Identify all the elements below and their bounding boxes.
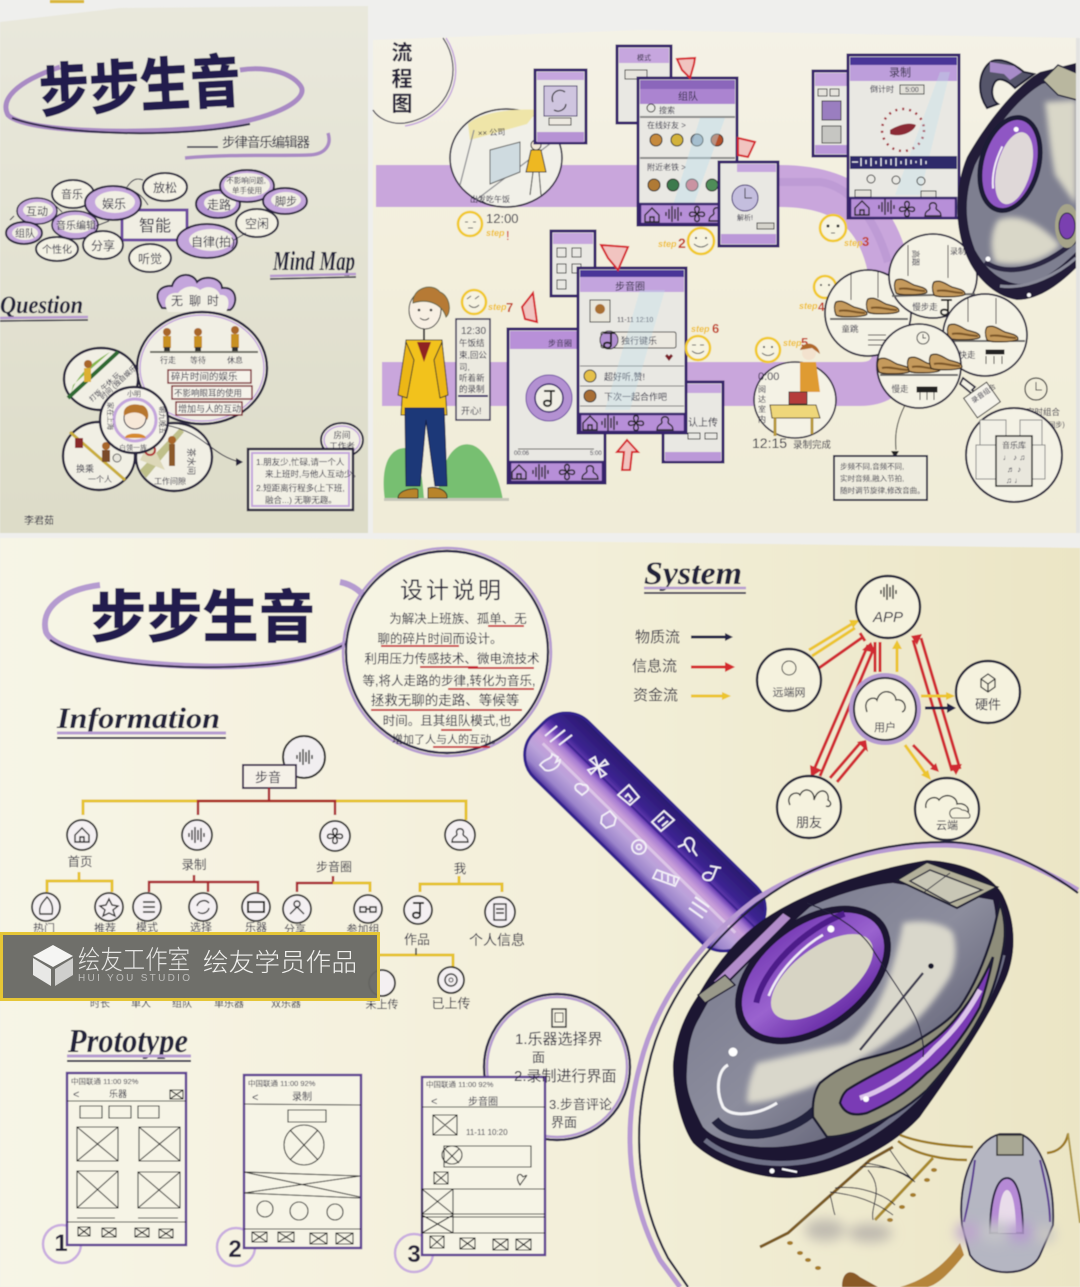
subtitle 步律音乐编辑器 [185, 133, 329, 158]
mind map: 个性化 [42, 243, 72, 256]
cover title 步步生音: 步步生音 [36, 35, 243, 129]
note: step 7 text: 听着新 [459, 373, 485, 383]
circles: footstep recording modes: 慢走 [891, 384, 909, 394]
clock icon and label: (同步) [1046, 421, 1065, 429]
phone: friends list back: 模式 [637, 53, 651, 62]
root: 步音 [243, 736, 325, 788]
step faces and labels: 12:00 [486, 211, 519, 226]
circle: commuting [63, 422, 135, 490]
node: APP [856, 576, 920, 638]
circle: bored scenarios [137, 312, 267, 424]
highlights and construction lines [718, 1065, 777, 1114]
note: step 7 text: 司, [459, 362, 470, 372]
circle: girl at desk [754, 344, 836, 438]
phone: 步音圈 main: 下次一起合作吧 [604, 391, 667, 402]
legend: flow types: 资金流 [633, 687, 678, 704]
legend: flow types: 信息流 [632, 658, 677, 675]
tree: information architecture [32, 736, 525, 1011]
caption: 12:15 录制完成: 12:15 [752, 435, 787, 451]
circles: footstep recording modes: 慢步走 [912, 302, 938, 312]
main title 步步生音 [45, 572, 374, 667]
tree: information architecture: 双乐器 [271, 998, 301, 1010]
lower housing [813, 903, 1005, 1137]
circle: composing sheets: 音乐库 [1002, 440, 1026, 450]
cloud: 无聊: 无聊时 [171, 294, 225, 308]
circle: girl at desk: 阅 [758, 385, 766, 394]
circle: character 小明 [100, 387, 168, 453]
step faces and labels: ! [506, 228, 510, 243]
circles: footstep recording modes: 童跳 [841, 324, 859, 334]
phone: arrow screen [535, 70, 586, 143]
note: step 7 text: 束,回公 [459, 350, 487, 360]
node: 硬件: 硬件 [975, 697, 1001, 712]
panel: design description circle [343, 548, 551, 756]
phone: left record list [813, 71, 856, 156]
tree: information architecture: 个人信息 [469, 932, 525, 948]
top left sliver [712, 912, 792, 985]
wireframe 2 [244, 1075, 361, 1248]
note circle: prototype list: 1.乐器选择界 [515, 1031, 603, 1048]
product: purple icon stick [511, 700, 779, 965]
note circle: prototype list: 3.步音评论 [549, 1097, 612, 1112]
wireframe 2: 录制 [292, 1090, 312, 1103]
wireframe 3: 11-11 10:20 [466, 1128, 508, 1137]
red arrows between screens [522, 58, 755, 470]
circle: composing sheets [966, 408, 1062, 502]
box: pain points: 来上班时,与他人互动少。 [265, 469, 361, 479]
phone: 录制 main: 录制 [889, 66, 911, 79]
circle: 房间工作者 [321, 423, 363, 457]
mind map: 自律(拍) [191, 234, 235, 249]
heading: 流程图: 程 [392, 68, 412, 91]
product: small device side view [961, 1134, 1053, 1272]
mind map: 脚步 [275, 194, 297, 208]
circle: character 小明: 白领一族 [119, 443, 147, 452]
wireframe 3: 中国联通 11:00 92% [426, 1079, 494, 1089]
panel: design description circle: 聊的碎片时间而设计。 [377, 631, 503, 646]
mind map [6, 170, 307, 272]
phone: lower right upload [663, 382, 723, 462]
tree: information architecture: 未上传 [366, 998, 398, 1011]
phone: 步音圈 main: 独行键乐 [621, 335, 657, 346]
wireframe 3: < [431, 1096, 437, 1108]
blurred watermark [805, 1219, 1055, 1243]
wireframe 3 [422, 1077, 545, 1255]
stick icons [540, 726, 721, 918]
node: 远端网 [757, 649, 821, 711]
pointer line and explanation box: 步频不同,音频不同, [840, 461, 904, 471]
node: 云端 [915, 778, 979, 840]
sketch: shoe with laces [760, 1133, 1080, 1287]
wireframe 1: 中国联通 11:00 92% [71, 1076, 139, 1086]
box: pain points: 融合...) 无聊无趣。 [265, 495, 337, 505]
mind map: 组队 [15, 227, 35, 240]
step faces and labels: step [799, 301, 818, 311]
node: 朋友 [777, 776, 841, 838]
caption: 12:15 录制完成: 录制完成 [793, 439, 832, 451]
circle: office break [136, 423, 212, 491]
clock icon and label: 定时组合 [1026, 407, 1061, 417]
circles: footstep recording modes: 录制 [950, 246, 966, 256]
step faces and labels: step [658, 239, 677, 249]
badge numbers: 3 [407, 1241, 421, 1268]
signature: 李君茹 [24, 514, 54, 527]
panel: system and prototype sheet [0, 538, 1080, 1287]
step faces and labels [458, 211, 869, 362]
panel: design description circle: 为解决上班族、孤单、无 [389, 612, 527, 626]
wireframe 1 [67, 1073, 186, 1245]
cloud: 无聊 [157, 275, 235, 312]
phone: 组队 main [638, 78, 737, 225]
number badges [43, 1225, 433, 1272]
arrows into note circle [960, 378, 1010, 428]
tree: information architecture: 我 [454, 862, 467, 876]
circle: bored scenarios: 休息 [227, 355, 243, 365]
tree: information architecture: 作品 [404, 932, 430, 947]
heading: System: System [644, 556, 742, 592]
step faces and labels: 2 [678, 235, 686, 251]
watermark banner [2, 934, 378, 1000]
tree: information architecture: 单乐器 [214, 998, 244, 1010]
wireframe 1: 乐器 [109, 1088, 127, 1099]
people icons [163, 326, 239, 351]
panel: design description circle: 增加了人与人的互动。 [392, 732, 502, 746]
phone: 步音圈 main: 超好听,赞! [604, 371, 645, 382]
heading: 流程图: 图 [392, 93, 412, 116]
tree: information architecture: 推荐 [94, 921, 116, 935]
lower purple drop [840, 957, 993, 1114]
step faces and labels: step [783, 338, 802, 348]
heading: Mind Map [270, 246, 356, 279]
phone: 步音圈 main: 步音圈 [615, 280, 645, 293]
badge numbers: 2 [228, 1236, 242, 1263]
panel: flow chart sheet [373, 30, 1080, 533]
circle: 房间工作者: 工作者 [329, 441, 355, 451]
step faces and labels: step [488, 302, 507, 312]
note: step 7 text [456, 319, 490, 420]
tree: information architecture: 单人 [131, 998, 151, 1010]
note: step 7 text: 12:30 [461, 326, 486, 337]
circle: girl at desk: 0:00 [758, 371, 779, 383]
legend: flow types: 物质流 [635, 629, 680, 646]
mind map centre: 智能: 智能 [139, 217, 171, 235]
circle: alone at lunchtime: 时间 (独自娱乐) [98, 362, 140, 401]
top button [897, 862, 997, 908]
phone: clock [719, 162, 778, 246]
mind map: 单手使用 [232, 185, 262, 195]
circle: composing sheets: ♬ ♪ [1007, 465, 1021, 474]
badge numbers [54, 1230, 421, 1268]
circle: office break: 工作间隙 [154, 476, 186, 486]
tree: information architecture: 参加组 [346, 922, 380, 936]
mind map: 音乐 [61, 187, 83, 201]
studio name: HUI YOU STUDIO [78, 973, 190, 984]
circles: footstep recording modes [825, 234, 1027, 408]
tree: information architecture: 首页 [67, 855, 93, 869]
big arc dark line [639, 842, 1078, 1287]
circle: commuting: 换乘 [76, 463, 94, 474]
tree: information architecture: 分享 [284, 922, 306, 936]
tree: information architecture: 已上传 [431, 996, 471, 1011]
phone: friends list back [617, 46, 671, 123]
banner caption: 绘友学员作品 [203, 943, 357, 979]
panel: design description circle: 利用压力传感技术、微电流技术 [364, 651, 540, 666]
product: upper right device [957, 38, 1080, 533]
circle: character 小明: 朝九晚五 [158, 406, 167, 434]
circle: bored scenarios: 增加与人的互动 [178, 403, 241, 414]
phone: 录制 main [848, 55, 959, 218]
node: 硬件 [956, 661, 1020, 723]
phone: 录制 main: 倒计时 [870, 84, 894, 94]
purple oval [709, 877, 917, 1073]
node: 远端网: 远端网 [772, 686, 806, 699]
step faces and labels: 7 [506, 300, 513, 315]
note cards [964, 382, 1000, 418]
phone: 组队 main: 在线好友 > [647, 120, 686, 130]
tree: information architecture: 步音圈 [316, 859, 352, 874]
pointer line and explanation box [834, 405, 927, 500]
step faces and labels: 6 [712, 321, 719, 336]
panel: design description circle: 拯救无聊的走路、等候等 [371, 692, 519, 708]
wireframe 1: < [73, 1089, 79, 1101]
circle: alone at lunchtime: 打饭,午休,玩 [87, 370, 122, 403]
tree: information architecture: 模式 [136, 921, 158, 934]
big sweeping arc [630, 845, 1078, 1287]
phone: 步音圈 main [578, 268, 686, 433]
phone: lower left player: 步音圈 [548, 338, 572, 348]
purple journey band [376, 182, 895, 384]
phone: small list [551, 231, 595, 296]
wireframe 2: 中国联通 11:00 92% [248, 1078, 316, 1088]
mind map: 听觉 [138, 252, 162, 266]
figure: man in yellow jacket [384, 287, 509, 501]
heading: Question: Question [0, 292, 83, 319]
phone: 组队 main: 附近老铁 > [647, 162, 686, 172]
tree: information architecture: 录制 [181, 858, 207, 872]
system diagram [757, 576, 1020, 840]
level two nodes [32, 893, 515, 927]
panel: design description circle: 时间。且其组队模式,也 [383, 713, 511, 728]
note: step 7 text: 的录制 [459, 384, 485, 394]
tree: information architecture: 乐器 [245, 921, 267, 934]
mind map: 走路 [207, 197, 231, 212]
step faces and labels: step [691, 324, 710, 334]
circle: girl at desk: 内 [758, 414, 766, 424]
circle: bored scenarios: 碎片时间的娱乐 [171, 371, 238, 383]
phone: lower left player [508, 329, 605, 483]
tree: information architecture: 时长 [90, 998, 110, 1010]
mind map: 分享 [91, 238, 115, 253]
main title 步步生音: 步步生音 [90, 572, 315, 654]
circle: 房间工作者: 房间 [333, 430, 351, 440]
box: pain points: 2.短距离行程多(上下班, [256, 483, 345, 493]
note: step 7 text: 午饭结 [459, 338, 485, 348]
mind map: 放松 [153, 180, 177, 195]
circle: commuting: 一个人 [88, 475, 112, 484]
product: large device [673, 860, 1014, 1178]
circle: alone at lunchtime [64, 348, 140, 410]
circle: office scene [450, 109, 562, 207]
tree: information architecture: 热门 [33, 921, 55, 935]
circles: footstep recording modes: 高跟 [911, 250, 921, 266]
heading: Mind Map: Mind Map [272, 246, 355, 276]
panel: design description circle: 等,将人走路的步律,转化为音乐, [363, 673, 535, 688]
circle: composing sheets: ♫ ♩ [1006, 476, 1022, 485]
mind map centre: 智能 [122, 210, 187, 240]
node: 用户 [851, 675, 919, 743]
phone: lower left player: 00:06 [514, 451, 530, 457]
badge numbers: 1 [54, 1230, 68, 1257]
mind map: 音乐编辑 [56, 219, 96, 232]
panel: design description circle: 设计说明 [400, 577, 504, 603]
node: 用户: 用户 [874, 720, 896, 734]
phone: 组队 main: 组队 [678, 90, 698, 103]
clock icon and label [1025, 378, 1065, 429]
pointer line and explanation box: 随时调节旋律,修改音曲。 [840, 485, 925, 495]
mind map: 互动 [26, 205, 48, 218]
circle: character 小明: 家在上海 [106, 402, 115, 430]
note circle: prototype list: 面 [532, 1050, 545, 1065]
mind map: 不影响问题, [226, 175, 266, 185]
mind map: 娱乐 [102, 197, 126, 211]
box: pain points: 1.朋友少,忙碌,请一个人 [256, 457, 345, 467]
circle: character 小明: 小明 [127, 389, 141, 398]
logo cube [33, 945, 73, 986]
phone: 录制 main: 5:00 [905, 87, 919, 94]
mind map: 空闲 [245, 217, 269, 231]
wireframe 3: 步音圈 [468, 1095, 498, 1108]
node: 朋友: 朋友 [796, 815, 822, 830]
note: step 7 text: 开心! [461, 406, 482, 416]
heading: 流程图: 流 [392, 42, 412, 65]
studio name: 绘友工作室 [78, 940, 190, 977]
level two icons [40, 897, 506, 920]
phone: lower left player: 5:00 [590, 451, 602, 457]
circle: girl at desk: 室 [758, 404, 766, 414]
circle: bored scenarios: 等待 [190, 355, 206, 365]
heading: Prototype: Prototype [67, 1023, 188, 1060]
note cards: 录音组合 [969, 382, 998, 405]
legend: flow types [632, 629, 735, 704]
circle: girl at desk: 达 [758, 394, 766, 404]
phone: clock: 解析! [737, 213, 753, 222]
circles: footstep recording modes: 快走 [958, 350, 976, 360]
heading: Information: Information [56, 702, 220, 735]
tree nodes below watermark [369, 967, 464, 996]
wireframe 2: < [252, 1092, 258, 1104]
step faces and labels: step [844, 238, 863, 248]
tree: information architecture: 组队 [172, 997, 192, 1010]
phone: 组队 main: 搜索 [659, 105, 675, 115]
phone: 步音圈 main: 11-11 12:10 [617, 317, 653, 324]
note circle: prototype list [484, 994, 630, 1140]
node: 云端: 云端 [936, 819, 958, 832]
circle: bored scenarios: 不影响眼耳的使用 [174, 388, 242, 398]
tree: information architecture: 选择 [190, 920, 212, 934]
subtitle 步律音乐编辑器: 步律音乐编辑器 [222, 134, 310, 150]
phone: lower right upload: 认上传 [688, 416, 718, 429]
circle: office break: 茶水间 [186, 448, 197, 475]
step faces and labels: 3 [862, 234, 869, 249]
circle: bored scenarios: 行走 [160, 355, 176, 365]
box: pain points [248, 449, 361, 510]
note circle: prototype list: 界面 [551, 1115, 577, 1130]
circle: office scene: ×× 公司 [478, 128, 506, 138]
node: APP: APP [872, 609, 903, 626]
panel: cover and mind map sheet [0, 0, 368, 533]
level one nodes [67, 820, 475, 851]
root: 步音: 步音 [255, 770, 281, 785]
circle: office scene: 出发吃午饭 [470, 194, 510, 204]
step faces and labels: 4 [818, 300, 825, 314]
caption: 12:15 录制完成 [752, 435, 832, 451]
flow arrows [809, 620, 962, 782]
heading: 流程图 [373, 38, 456, 126]
circle: composing sheets: ♩ ♪ ♫ [1003, 453, 1025, 462]
step faces and labels: step [486, 228, 505, 238]
note line over wireframe 3: 2.录制进行界面 [514, 1068, 617, 1085]
pointer line and explanation box: 实时音频,融入节拍, [840, 473, 904, 483]
step faces and labels: 5 [801, 335, 808, 350]
